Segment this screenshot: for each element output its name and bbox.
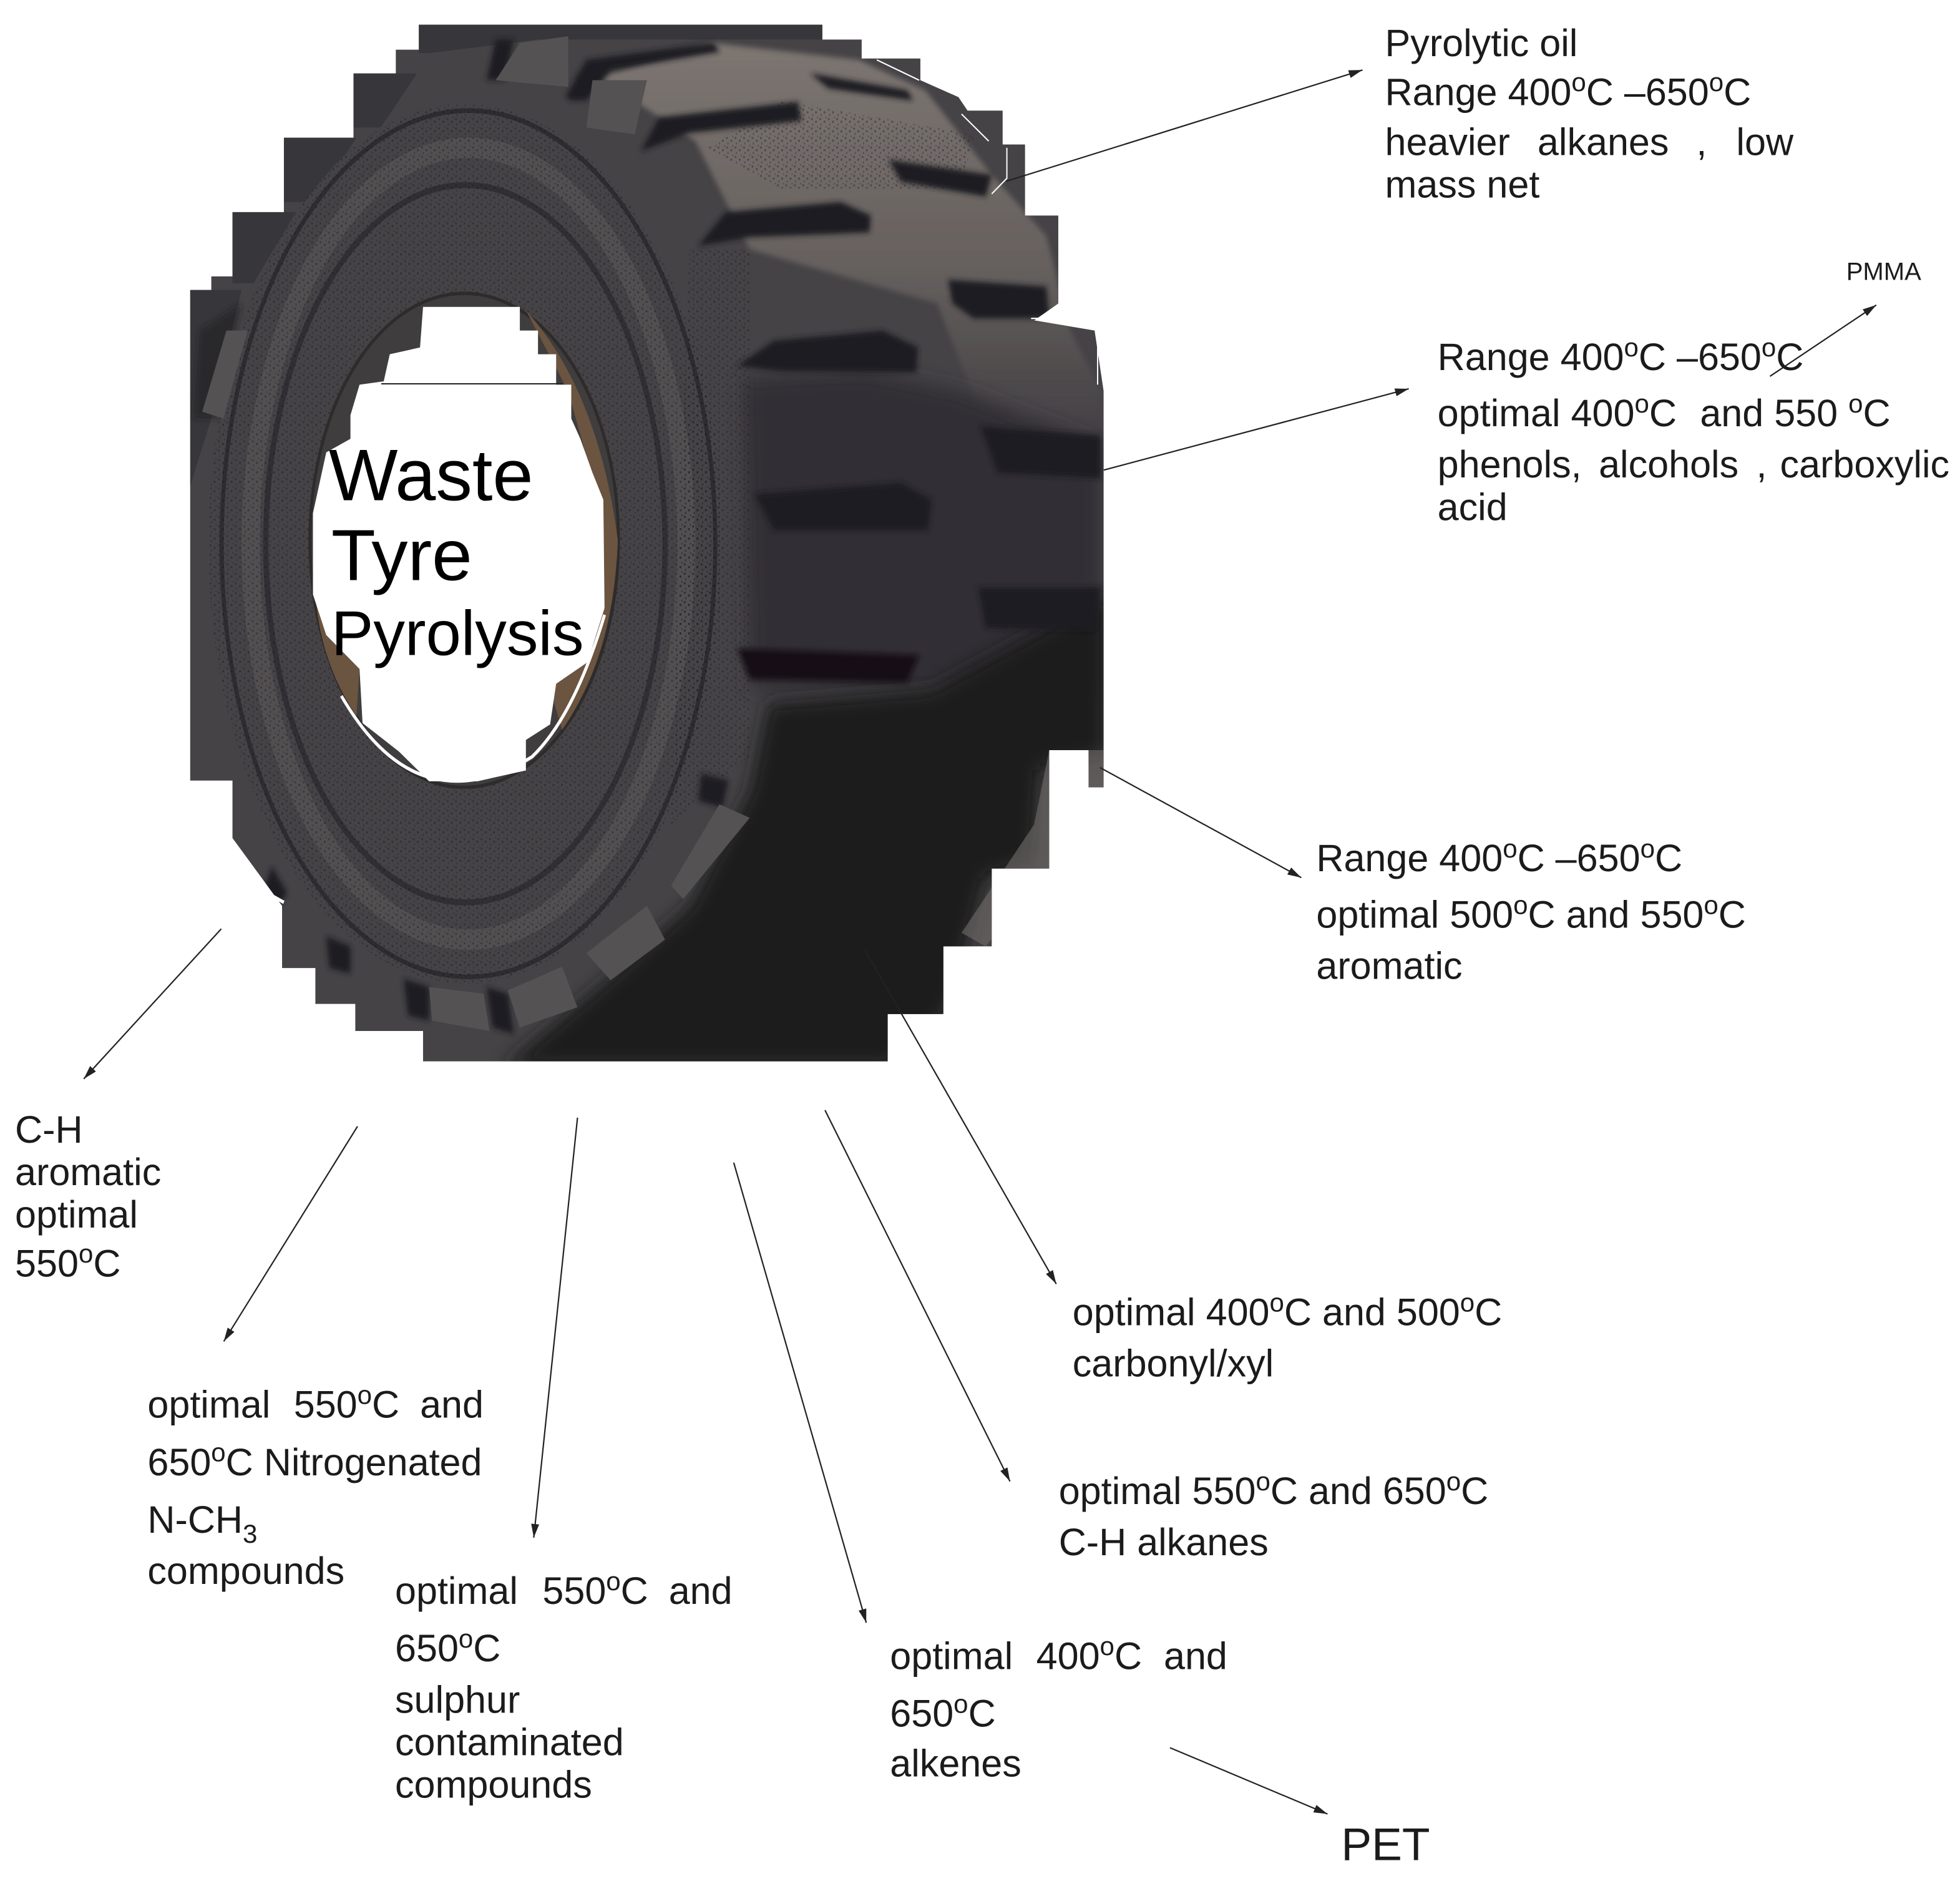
tyre image: [175, 12, 1143, 1095]
label: C-H alkanes: C and 650: [1270, 1470, 1446, 1512]
label: pyrolytic oil: o: [1571, 67, 1586, 97]
label: aromatic: o: [1503, 834, 1518, 863]
label: nitrogenated compounds: o: [358, 1380, 372, 1410]
label: C-H aromatic: C-H: [15, 1108, 83, 1151]
label: alkenes: o: [953, 1689, 968, 1718]
arrow: to nitrogenated compounds: [224, 1126, 358, 1341]
title: Waste Tyre Pyrolysis: [329, 434, 584, 669]
label: nitrogenated compounds: 650: [147, 1441, 211, 1483]
label: sulphur contaminated compounds: 650: [395, 1627, 459, 1669]
label: aromatic: C –650: [1518, 837, 1641, 879]
label: phenols, alcohols, carboxylic acid: alcohols: [1599, 443, 1738, 486]
label: phenols, alcohols, carboxylic acid: acid: [1438, 486, 1508, 528]
arrow: to PMMA: [1770, 305, 1876, 376]
label: sulphur contaminated compounds: o: [606, 1566, 621, 1596]
label: C-H alkanes: o: [1255, 1467, 1270, 1496]
label: sulphur contaminated compounds: and: [669, 1570, 733, 1612]
label: phenols, alcohols, carboxylic acid: ,: [1756, 443, 1767, 486]
label: sulphur contaminated compounds: C: [621, 1570, 648, 1612]
label: alkenes: C: [968, 1692, 996, 1734]
corner background: [962, 750, 1107, 946]
label: PMMA: PMMA: [1846, 258, 1921, 286]
white edge at upper right: [877, 60, 1098, 384]
sidewall inner ridge: [266, 185, 665, 902]
label: aromatic: [1316, 834, 1746, 987]
label: sulphur contaminated compounds: contaminated: [395, 1721, 624, 1763]
label: phenols, alcohols, carboxylic acid: [1438, 333, 1949, 528]
label: phenols, alcohols, carboxylic acid: phenols,: [1438, 443, 1582, 486]
label: aromatic: aromatic: [1316, 944, 1463, 987]
dither texture: [208, 104, 723, 984]
label: pyrolytic oil: C –650: [1586, 71, 1709, 113]
label: carbonyl/xyl: o: [1460, 1287, 1475, 1317]
label: phenols, alcohols, carboxylic acid: C: [1649, 392, 1677, 434]
title: Waste Tyre Pyrolysis: Tyre: [331, 514, 472, 595]
tyre rim: [310, 293, 618, 788]
label: carbonyl/xyl: C and 500: [1284, 1291, 1460, 1333]
label: nitrogenated compounds: 550: [294, 1384, 358, 1426]
label: phenols, alcohols, carboxylic acid: o: [1624, 333, 1639, 362]
label: alkenes: 650: [890, 1692, 953, 1734]
label: carbonyl/xyl: [1073, 1287, 1502, 1385]
arrow: to phenols: [1104, 389, 1409, 470]
sidewall outer rim: [222, 110, 715, 977]
label: C-H alkanes: C-H alkanes: [1059, 1521, 1269, 1563]
label: aromatic: Range 400: [1316, 837, 1503, 879]
label: C-H aromatic: [15, 1108, 161, 1284]
label: alkenes: o: [1100, 1631, 1114, 1661]
label: PET: PET: [1341, 1820, 1430, 1870]
label: alkenes: [890, 1631, 1227, 1785]
label: C-H alkanes: o: [1446, 1467, 1461, 1496]
tyre hole: [313, 307, 605, 781]
label: alkenes: 400: [1036, 1634, 1100, 1677]
sidewall middle ridge: [251, 148, 686, 940]
label: carbonyl/xyl: C: [1475, 1291, 1502, 1333]
label: phenols, alcohols, carboxylic acid: optimal 400: [1438, 392, 1634, 434]
label: alkenes: C: [1114, 1634, 1142, 1677]
label: nitrogenated compounds: o: [211, 1438, 226, 1467]
lit upper tread: [602, 41, 1091, 384]
label: nitrogenated compounds: C Nitrogenated: [226, 1441, 482, 1483]
label: aromatic: optimal 500: [1316, 893, 1513, 936]
label: phenols, alcohols, carboxylic acid: C: [1776, 336, 1803, 378]
label: C-H alkanes: optimal 550: [1059, 1470, 1255, 1512]
label: nitrogenated compounds: [147, 1380, 484, 1592]
label: nitrogenated compounds: compounds: [147, 1550, 344, 1592]
label: C-H aromatic: C: [93, 1242, 120, 1284]
middle tread: [744, 371, 1101, 689]
label: phenols, alcohols, carboxylic acid: o: [1762, 333, 1776, 362]
label: aromatic: C and 550: [1528, 893, 1704, 936]
label: sulphur contaminated compounds: compounds: [395, 1764, 592, 1806]
label: phenols, alcohols, carboxylic acid: Range 400: [1438, 336, 1624, 378]
label: sulphur contaminated compounds: 550: [542, 1570, 606, 1612]
label: aromatic: C: [1655, 837, 1682, 879]
label: C-H aromatic: 550: [15, 1242, 79, 1284]
label: phenols, alcohols, carboxylic acid: C –650: [1639, 336, 1762, 378]
label: nitrogenated compounds: C: [372, 1384, 399, 1426]
label: pyrolytic oil: Range 400: [1385, 71, 1571, 113]
label: nitrogenated compounds: optimal: [147, 1384, 270, 1426]
tyre sidewall: [208, 100, 973, 987]
sidewall face: [305, 127, 381, 202]
rim highlight: [341, 615, 605, 781]
label: alkenes: alkenes: [890, 1742, 1021, 1785]
label: aromatic: o: [1704, 890, 1719, 919]
label: sulphur contaminated compounds: C: [473, 1627, 500, 1669]
label: C-H alkanes: [1059, 1467, 1488, 1563]
label: pyrolytic oil: low: [1736, 120, 1794, 163]
label: phenols, alcohols, carboxylic acid: o: [1634, 389, 1649, 418]
label: pyrolytic oil: Pyrolytic oil: [1385, 22, 1577, 64]
label: alkenes: optimal: [890, 1634, 1013, 1677]
label: carbonyl/xyl: o: [1270, 1287, 1284, 1317]
label: carbonyl/xyl: optimal 400: [1073, 1291, 1270, 1333]
tread grooves: [193, 39, 1101, 1034]
tread dither texture: [671, 100, 973, 824]
label: aromatic: C: [1719, 893, 1746, 936]
label: C-H alkanes: C: [1461, 1470, 1488, 1512]
label: phenols, alcohols, carboxylic acid: o: [1848, 389, 1863, 418]
label: C-H aromatic: optimal: [15, 1193, 138, 1236]
label: pyrolytic oil: o: [1709, 67, 1724, 97]
label: C-H aromatic: o: [79, 1239, 93, 1268]
label: phenols, alcohols, carboxylic acid: carboxylic: [1780, 443, 1949, 486]
label: carbonyl/xyl: carbonyl/xyl: [1073, 1342, 1274, 1385]
label: phenols, alcohols, carboxylic acid: and 550: [1700, 392, 1848, 434]
label: nitrogenated compounds: and: [420, 1384, 484, 1426]
arrow: to sulphur compounds: [534, 1118, 577, 1538]
tan rim patches: [315, 310, 618, 730]
arrow: to PET: [1170, 1747, 1327, 1814]
label: nitrogenated compounds: 3: [243, 1519, 257, 1548]
label: alkenes: and: [1164, 1634, 1227, 1677]
arrow: to aromatic: [1100, 768, 1301, 877]
label: pyrolytic oil: alkanes: [1538, 120, 1669, 163]
label: sulphur contaminated compounds: sulphur: [395, 1678, 520, 1721]
title: Waste Tyre Pyrolysis: Waste: [329, 434, 534, 515]
label: sulphur contaminated compounds: [395, 1566, 733, 1806]
label: C-H aromatic: aromatic: [15, 1151, 161, 1193]
label: aromatic: o: [1513, 890, 1528, 919]
label: pyrolytic oil: C: [1724, 71, 1751, 113]
label: pyrolytic oil: mass net: [1385, 164, 1539, 206]
outer stair-step background fringe: [190, 25, 822, 486]
label: pyrolytic oil: [1385, 22, 1794, 206]
title: Waste Tyre Pyrolysis: Pyrolysis: [331, 598, 584, 669]
shadowed lower tread: [502, 595, 1107, 1068]
hole line: [381, 383, 562, 384]
arrow: to C-H alkanes: [825, 1110, 1010, 1482]
arrow: to carbonyl/xyl: [865, 950, 1056, 1284]
label: pyrolytic oil: ,: [1696, 120, 1707, 163]
label: nitrogenated compounds: N-CH: [147, 1498, 243, 1541]
label: sulphur contaminated compounds: optimal: [395, 1570, 518, 1612]
label: pyrolytic oil: heavier: [1385, 120, 1510, 163]
arrow: to pyrolytic oil: [1007, 70, 1362, 181]
label: aromatic: o: [1641, 834, 1655, 863]
label: sulphur contaminated compounds: o: [459, 1624, 473, 1653]
shoulder tread blocks: [202, 36, 750, 1031]
tyre silhouette: [175, 12, 1143, 1095]
label: phenols, alcohols, carboxylic acid: C: [1863, 392, 1891, 434]
white edge at lower left: [233, 841, 284, 902]
arrow: to C-H aromatic: [84, 929, 222, 1079]
arrow: to alkenes: [734, 1163, 866, 1623]
